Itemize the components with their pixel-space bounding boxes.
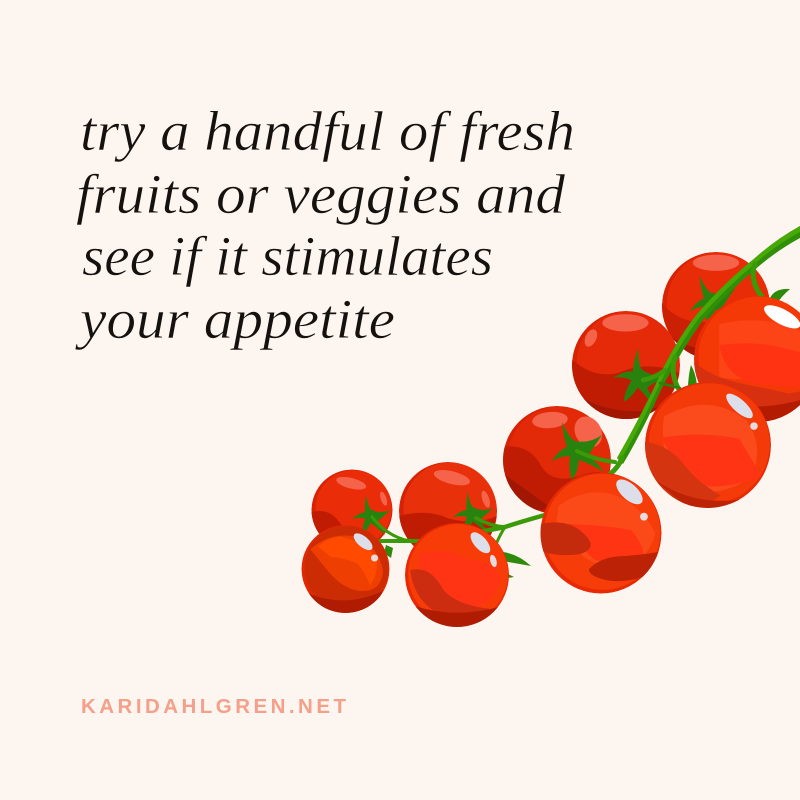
- back tomato: far left: [312, 470, 392, 540]
- back tomato: lower middle: [399, 462, 497, 546]
- front tomato: far left lower: [302, 525, 390, 617]
- vine stems: [372, 226, 800, 542]
- back tomato: middle: [572, 311, 680, 419]
- back tomato: top right: [662, 252, 770, 360]
- headline text: fruits or veggies and: [76, 164, 566, 226]
- headline text: your appetite: [75, 289, 395, 351]
- leaves behind front tomatoes: [384, 289, 790, 578]
- calyx stars: [349, 276, 737, 540]
- illustration: cherry tomatoes on the vine: [302, 226, 800, 632]
- infographic canvas: [75, 110, 800, 713]
- front tomato: lower right: [540, 472, 662, 594]
- front tomato: lower centre: [405, 523, 509, 632]
- headline text: [75, 101, 575, 351]
- headline text: see if it stimulates: [82, 226, 493, 288]
- front tomato: right centre: [645, 382, 771, 514]
- back tomato: centre: [503, 406, 611, 514]
- website footer: KARIDAHLGREN.NET: [81, 695, 346, 718]
- front tomato: upper right: [694, 296, 800, 422]
- headline text: try a handful of fresh: [80, 101, 575, 163]
